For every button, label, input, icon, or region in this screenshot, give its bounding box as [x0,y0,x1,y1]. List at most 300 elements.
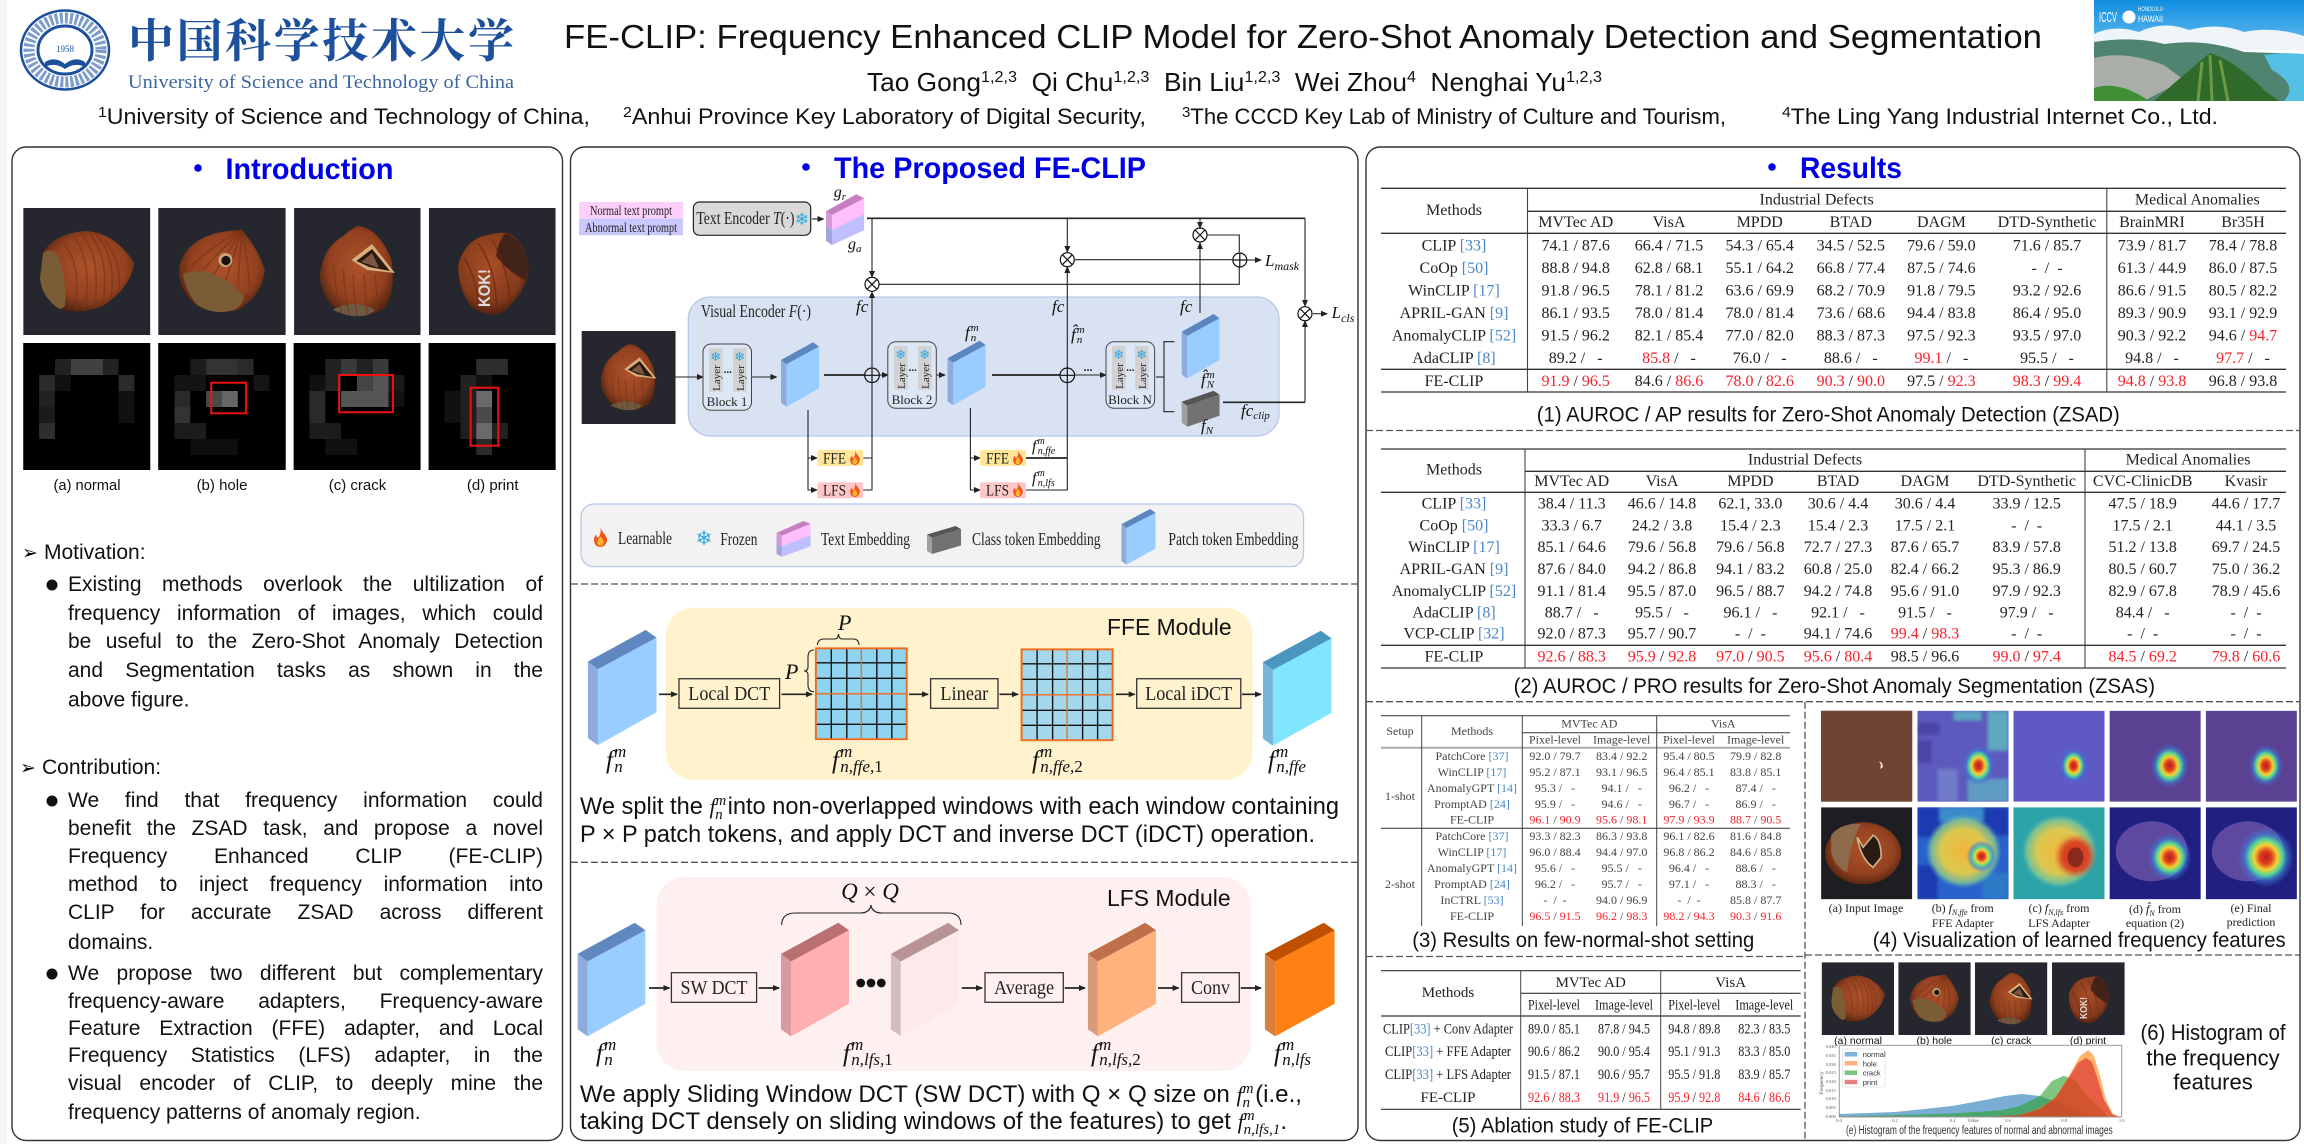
table: few-normal-shot results: 81.6 / 84.8 [1730,829,1781,843]
table: AUROC / PRO results: 97.9 / - [2000,604,2054,622]
FFE module diagram: n,ffe,1 [840,757,883,776]
hazelnut thumbnails [1822,962,2125,1047]
table: ablation study: 95.1 / 91.3 [1668,1044,1720,1060]
text block: contribution: CLIP for accurate ZSAD across different [68,901,543,924]
table: AUROC / AP results: FE-CLIP [1425,373,1483,390]
table: AUROC / PRO results: 95.6 / 80.4 [1804,648,1872,666]
loss labels: L [1332,303,1341,322]
feature labels: m [971,322,979,334]
table: AUROC / AP results: 95.5 / - [2020,350,2074,367]
table: ablation study: 90.6 / 86.2 [1528,1044,1580,1060]
table: ablation study: FE-CLIP [1420,1090,1476,1106]
FFE module diagram: f [832,747,839,774]
table: AUROC / PRO results: 24.2 / 3.8 [1632,518,1692,534]
table: few-normal-shot results: InCTRL [53] [1440,893,1504,907]
table: few-normal-shot results: 94.1 / - [1602,781,1642,795]
table: AUROC / PRO results: 96.5 / 88.7 [1716,583,1785,600]
table: AUROC / AP results: 94.8 / 93.8 [2118,373,2186,390]
table: AUROC / AP results: 78.4 / 78.8 [2209,238,2277,254]
table: ablation study: CLIP[33] + FFE Adapter [1385,1044,1511,1060]
table: few-normal-shot results: 79.9 / 82.8 [1730,749,1781,763]
table: AUROC / AP results: 93.1 / 92.9 [2209,305,2277,322]
table: few-normal-shot results: 94.6 / - [1602,797,1642,811]
authors: 1,2,3 [1244,69,1280,86]
table: AUROC / AP results: 73.6 / 68.6 [1817,305,1885,322]
axes labels: 0.2 [1892,1118,1898,1123]
table: few-normal-shot results: 98.2 / 94.3 [1663,909,1715,923]
table: AUROC / PRO results: 95.6 / 91.0 [1891,583,1959,600]
text block: motivation: ➢ [22,542,38,564]
table: AUROC / PRO results: BTAD [1817,473,1859,490]
feature labels: f [1201,416,1206,435]
table: ablation study: CLIP[33] + Conv Adapter [1383,1022,1513,1038]
table: few-normal-shot results: WinCLIP [17] [1438,845,1506,859]
FFE description [580,793,1339,848]
table: ablation study: 90.6 / 95.7 [1598,1067,1650,1083]
diagram legend [581,504,1304,567]
feature labels: f [965,323,970,342]
table: few-normal-shot results: 96.4 / - [1669,861,1709,875]
table: AUROC / AP results: 91.9 / 96.5 [1541,373,1610,390]
table: AUROC / PRO results: 62.1, 33.0 [1718,496,1782,512]
encoder block 1: Layer [735,365,747,391]
visualization sub-captions: prediction [2227,915,2275,929]
table: ablation study [1381,971,1801,1109]
table: ablation study: Image-level [1595,998,1653,1014]
feature labels: clip [1253,410,1270,422]
table: AUROC / PRO results: 88.7 / - [1545,604,1599,622]
visualization sub-captions: from [1967,901,1994,915]
table: AUROC / PRO results: Medical Anomalies [2126,452,2250,468]
table: few-normal-shot results: 94.0 / 96.9 [1596,893,1647,907]
table: AUROC / PRO results: MPDD [1727,473,1774,490]
loss labels: L [1265,251,1274,270]
table: AUROC / PRO results: 69.7 / 24.5 [2212,539,2280,556]
table: ablation study: 95.5 / 91.8 [1668,1067,1720,1083]
axes labels: 0.010 [1826,1096,1837,1101]
table: AUROC / PRO results: CLIP [33] [1422,496,1486,512]
table: few-normal-shot results: FE-CLIP [1450,909,1494,923]
ICCV conference photo: HONOLULU [2138,7,2163,13]
table: AUROC / PRO results: 92.0 / 87.3 [1537,626,1606,642]
feature labels: fc [856,297,869,316]
table: AUROC / PRO results: 80.5 / 60.7 [2108,561,2177,578]
table: AUROC / AP results: 91.5 / 96.2 [1541,328,1610,344]
FFE description: P × P patch tokens, and apply DCT and inverse DCT (iDCT) operation. [580,821,1315,848]
table: ablation study: Methods [1422,985,1474,1001]
encoder block 2: Block 2 [892,392,932,407]
table: AUROC / PRO results: AnomalyCLIP [52] [1392,583,1516,600]
caption: histogram: the frequency [2146,1046,2280,1070]
FFE module diagram: P [837,610,851,635]
table: AUROC / PRO results: MVTec AD [1534,473,1609,490]
table: few-normal-shot results: MVTec AD [1561,716,1618,730]
table: AUROC / AP results: Br35H [2221,214,2265,231]
table: AUROC / PRO results: 84.4 / - [2116,604,2170,622]
caption: table 1: (1) AUROC / AP results for Zero-Shot Anomaly Detection (ZSAD) [1537,404,2120,426]
authors: 1,2,3 [1113,69,1149,86]
table: AUROC / PRO results: 97.0 / 90.5 [1716,648,1785,666]
FFE module diagram: Linear [940,684,989,705]
table: few-normal-shot results: 96.2 / - [1535,877,1575,891]
table: AUROC / AP results: 78.0 / 81.4 [1635,305,1703,322]
feature labels [856,297,1270,489]
LFS module diagram: f [1274,1040,1281,1067]
table: AUROC / AP results: 66.4 / 71.5 [1635,238,1703,254]
table: few-normal-shot results: 95.5 / - [1602,861,1642,875]
table: AUROC / AP results: 99.1 / - [1915,350,1968,367]
FFE description: We split the f [580,793,716,820]
encoder block N: ❄ [1113,348,1124,363]
table: few-normal-shot results [1381,716,1790,926]
table: few-normal-shot results: Pixel-level [1529,732,1582,746]
FFE description: n [715,807,723,823]
table: few-normal-shot results: 93.3 / 82.3 [1529,829,1581,843]
axes labels: 1.0 [2119,1118,2125,1123]
diagram legend: Learnable [618,528,672,548]
hazelnut thumbnails: (a) normal [1834,1035,1882,1047]
LFS module diagram: f [1091,1040,1098,1067]
heatmap: crack [294,343,421,470]
axes labels: 0.020 [1826,1079,1837,1084]
visualization sub-captions: from [2063,901,2090,915]
diagram legend: Class token Embedding [972,529,1100,549]
affiliations: University of Science and Technology of China, [107,104,590,129]
adapter boxes: LFS [986,482,1009,500]
table: AUROC / AP results: 82.1 / 85.4 [1635,328,1703,344]
authors: 1,2,3 [1566,69,1602,86]
table: few-normal-shot results: - / - [1543,893,1567,907]
table: AUROC / PRO results: 60.8 / 25.0 [1804,561,1872,578]
table: few-normal-shot results: 95.4 / 80.5 [1663,749,1715,763]
ICCV conference photo [2094,0,2304,101]
hazelnut photos row [23,208,556,335]
table: AUROC / PRO results: - / - [2011,626,2042,642]
visualization of learned frequency features [1821,711,2297,930]
table: AUROC / PRO results: 94.1 / 83.2 [1716,561,1785,578]
heading: introduction: Introduction [226,153,394,186]
table: AUROC / PRO results: 75.0 / 36.2 [2212,561,2280,578]
table: few-normal-shot results: 96.1 / 82.6 [1663,829,1715,843]
feature labels: n,lfs [1038,478,1055,489]
FFE module diagram [588,608,1332,780]
encoder block 1: ... [724,364,732,376]
table: AUROC / PRO results: VCP-CLIP [32] [1403,626,1505,642]
table: AUROC / AP results: 78.1 / 81.2 [1635,282,1703,300]
legend: print [1863,1078,1878,1087]
FFE module title: FFE Module [1107,614,1232,640]
FFE module diagram: f [606,747,613,774]
table: AUROC / PRO results: 99.4 / 98.3 [1891,626,1959,642]
table: AUROC / AP results: Industrial Defects [1760,192,1874,208]
histogram chart [1819,1044,2125,1124]
table: few-normal-shot results: 96.1 / 90.9 [1529,812,1581,826]
table: AUROC / AP results: 54.3 / 65.4 [1725,238,1794,254]
encoder block 1: Block 1 [707,394,747,409]
FFE module diagram: m [1040,742,1052,761]
adapter boxes: FFE [986,450,1009,468]
encoder block 2: Layer [920,363,932,389]
encoder block N: Layer [1114,363,1126,389]
FFE module diagram: P [784,659,798,684]
table: AUROC / AP results: 84.6 / 86.6 [1635,373,1703,390]
table: AUROC / PRO results: 91.5 / - [1898,604,1952,622]
table: ablation study: 91.5 / 87.1 [1528,1067,1580,1083]
table: few-normal-shot results: 95.6 / 98.1 [1596,812,1647,826]
table: AUROC / AP results: VisA [1653,214,1686,231]
table: AUROC / PRO results: 46.6 / 14.8 [1628,496,1696,512]
legend: normal [1863,1050,1886,1059]
table: AUROC / AP results: 93.2 / 92.6 [2013,282,2081,300]
feature labels: f [1032,438,1036,455]
LFS description: n [1243,1095,1250,1111]
table: AUROC / AP results: 90.3 / 90.0 [1817,373,1885,390]
axes labels: 0.040 [1826,1044,1837,1049]
affiliations [98,104,2218,129]
table: AUROC / PRO results: VisA [1646,473,1679,490]
table: few-normal-shot results: AnomalyGPT [14] [1427,781,1517,795]
table: AUROC / PRO results: 94.1 / 74.6 [1804,626,1872,642]
axes labels [1819,1044,2125,1124]
table: AUROC / PRO results: 30.6 / 4.4 [1895,496,1955,512]
table: few-normal-shot results: 85.8 / 87.7 [1730,893,1781,907]
table: AUROC / PRO results: DAGM [1901,473,1949,490]
authors: 1,2,3 [981,69,1017,86]
table: few-normal-shot results: Image-level [1727,732,1785,746]
text block: contribution: Frequency Enhanced CLIP (FE-CLIP) [68,845,543,868]
text block: contribution: Feature Extraction (FFE) adapter, and Local [68,1017,543,1040]
text block: motivation: Motivation: [44,541,146,564]
table: few-normal-shot results: PatchCore [37] [1436,829,1508,843]
table: AUROC / PRO results: 82.4 / 66.2 [1891,561,1959,578]
encoder block N [1106,342,1155,408]
table: ablation study: 92.6 / 88.3 [1528,1090,1580,1106]
feature labels: m [1207,369,1215,381]
table: AUROC / PRO results: 94.2 / 86.8 [1628,561,1696,578]
text block: motivation [22,541,543,711]
FFE module diagram: n [614,757,623,776]
image captions: (c) crack [329,477,387,494]
visualization sub-captions: (e) Final [2230,901,2272,915]
prompts: Normal text prompt [590,203,672,218]
frequency heatmaps row [23,343,556,470]
feature labels: fc [1052,297,1065,316]
table: AUROC / AP results: 62.8 / 68.1 [1635,260,1703,277]
table: AUROC / AP results: 68.2 / 70.9 [1817,282,1885,300]
table: AUROC / AP results: 89.2 / - [1549,350,1603,367]
table: few-normal-shot results: Methods [1451,724,1493,738]
visualization sub-captions: equation (2) [2126,916,2184,930]
table: AUROC / AP results: 86.6 / 91.5 [2118,282,2186,300]
feature labels: m [1037,436,1045,447]
table: few-normal-shot results: Setup [1386,724,1414,738]
LFS module diagram [578,877,1335,1071]
text block: contribution: visual encoder of CLIP, to deeply mine the [68,1072,543,1095]
feature labels: n [1077,334,1083,346]
table: AUROC / AP results: DTD-Synthetic [1998,214,2096,231]
adapter boxes [817,450,1026,500]
hazelnut thumbnails: KOK! [2079,997,2090,1019]
LFS module diagram: n,lfs,1 [851,1050,893,1069]
LFS description: m [1244,1108,1255,1124]
LFS module diagram: m [1099,1035,1111,1054]
text block: contribution: We find that frequency information could [68,789,543,812]
table: ablation study: 83.3 / 85.0 [1738,1044,1790,1060]
table: AUROC / AP results: 94.8 / - [2125,350,2179,367]
table: few-normal-shot results: 1-shot [1385,789,1416,803]
ICCV conference photo: HAWAII [2138,14,2163,24]
table: AUROC / PRO results: 97.9 / 92.3 [1992,583,2061,600]
table: AUROC / AP results: BrainMRI [2119,214,2185,231]
table: AUROC / AP results: DAGM [1917,214,1966,231]
text block: contribution [20,756,543,1124]
icon: university seal [21,10,109,90]
table: AUROC / AP results: CLIP [33] [1422,238,1486,254]
table: few-normal-shot results: 96.8 / 86.2 [1663,845,1715,859]
encoder block 2: Layer [896,363,908,389]
table: AUROC / PRO results: 96.1 / - [1724,604,1777,622]
affiliations: 1 [98,104,107,121]
FFE module diagram: m [614,742,626,761]
table: AUROC / PRO results: WinCLIP [17] [1408,539,1500,556]
table: AUROC / AP results: 88.6 / - [1824,350,1878,367]
table: ablation study: Image-level [1735,998,1793,1014]
table: AUROC / PRO results: - / - [1735,626,1766,642]
encoder block 1: ❄ [734,350,745,365]
connector arrows and lines [676,218,1327,490]
table: few-normal-shot results: 87.4 / - [1736,781,1776,795]
axes labels: 0.8 [2061,1118,2068,1123]
encoder block 1: Layer [711,365,723,391]
table: AUROC / AP results: 80.5 / 82.2 [2209,282,2277,300]
table: AUROC / AP results: 89.3 / 90.9 [2118,305,2186,322]
axes labels: Frequency [1819,1071,1825,1095]
axes labels: 0.015 [1826,1088,1837,1093]
table: few-normal-shot results: 95.2 / 87.1 [1529,765,1581,779]
axes labels: 0.000 [1826,1114,1837,1119]
table: AUROC / PRO results: Industrial Defects [1748,452,1862,468]
table: few-normal-shot results: PatchCore [37] [1436,749,1508,763]
table: few-normal-shot results: WinCLIP [17] [1438,765,1506,779]
feature labels: ... [1084,360,1092,374]
table: AUROC / PRO results: - / - [2230,626,2262,642]
axes labels: 0.035 [1826,1053,1837,1058]
table: AUROC / AP results: 78.0 / 81.4 [1725,305,1794,322]
visualization sub-captions: (a) Input Image [1829,901,1903,915]
encoder block 2: ❄ [919,348,930,363]
table: AUROC / AP results: Methods [1426,202,1482,219]
authors: Nenghai Yu [1416,67,1566,97]
image captions: (b) hole [197,477,247,494]
encoder block N: ❄ [1136,348,1147,363]
legend [1843,1049,1886,1087]
feature labels: N [1205,425,1214,437]
table: few-normal-shot results: VisA [1711,716,1736,730]
table: AUROC / AP results: 66.8 / 77.4 [1817,260,1885,277]
table: AUROC / PRO results: 79.6 / 56.8 [1628,539,1696,556]
table: AUROC / AP results: 96.8 / 93.8 [2209,373,2277,390]
axes labels: 0.0 [1836,1118,1843,1123]
text encoder: ❄ [795,210,809,230]
table: AUROC / PRO results: 92.6 / 88.3 [1537,648,1606,666]
LFS module diagram: n [604,1050,613,1069]
feature labels: m [1037,468,1045,479]
logo English wordmark: University of Science and Technology of China [128,72,515,93]
authors: Tao Gong [867,67,980,97]
table: AUROC / AP results: 94.4 / 83.8 [1907,305,1976,322]
feature labels: n [971,332,977,344]
table: AUROC / PRO results: 33.3 / 6.7 [1541,518,1602,534]
anomaly boxes [211,375,498,446]
row 2: hazelnut samples [1821,807,2297,899]
adapter boxes: FFE [823,450,846,468]
table: AUROC / AP results: 79.6 / 59.0 [1907,238,1976,254]
text block: contribution: We propose two different but complementary [68,962,543,985]
caption: table 3: (3) Results on few-normal-shot setting [1412,929,1754,952]
table: AUROC / AP results: 97.5 / 92.3 [1907,373,1976,390]
text block: contribution: domains. [68,931,153,954]
table: AUROC / AP results: AnomalyCLIP [52] [1392,328,1516,344]
text encoder [693,202,811,235]
table: few-normal-shot results: FE-CLIP [1450,812,1494,826]
table: AUROC / AP results: - / - [2031,260,2063,277]
table: AUROC / PRO results: 95.7 / 90.7 [1628,626,1696,642]
FFE module diagram: Local DCT [688,684,770,705]
table: AUROC / PRO results: 84.5 / 69.2 [2108,648,2177,666]
feature labels: f [1032,470,1036,487]
table: AUROC / AP results: 88.3 / 87.3 [1817,328,1885,344]
table: AUROC / AP results [1381,188,2286,392]
table: AUROC / AP results: 71.6 / 85.7 [2013,238,2081,254]
table: AUROC / PRO results: 95.5 / 87.0 [1628,583,1696,600]
table: few-normal-shot results: 95.9 / - [1535,797,1575,811]
table: AUROC / AP results: 34.5 / 52.5 [1817,238,1885,254]
visualization sub-captions: (d) f̂ [2129,902,2149,916]
diagram legend: ❄ [696,526,712,550]
table: AUROC / AP results: Medical Anomalies [2135,192,2260,208]
text embedding: g [834,184,842,201]
table: few-normal-shot results: 83.8 / 85.1 [1730,765,1781,779]
icon: university seal: 1958 [56,44,74,54]
table: few-normal-shot results: 88.6 / - [1736,861,1776,875]
encoder block 2: ... [909,362,917,374]
table: AUROC / PRO results: 47.5 / 18.9 [2108,496,2177,512]
table: AUROC / AP results: MVTec AD [1538,214,1613,231]
chart caption: (e) Histogram of the frequency features of normal and abnormal images [1846,1125,2113,1137]
logo Chinese wordmark: 中国科学技术大学 [128,5,514,71]
LFS module diagram: n,lfs [1282,1050,1311,1069]
FFE module diagram: m [1276,742,1288,761]
panel: results [1366,147,2300,1140]
table: AUROC / AP results: 86.1 / 93.5 [1541,305,1610,322]
table: few-normal-shot results: 95.7 / - [1602,877,1642,891]
LFS module diagram: Conv [1191,978,1230,999]
table: AUROC / AP results: CoOp [50] [1420,260,1488,277]
table: AUROC / PRO results: 95.3 / 86.9 [1992,561,2061,578]
LFS module diagram: n,lfs,2 [1099,1050,1141,1069]
table: AUROC / PRO results: AdaCLIP [8] [1412,604,1496,622]
text block: contribution: frequency-aware adapters, Frequency-aware [68,990,543,1013]
loss labels [1264,251,1355,325]
axes labels: 0.6 [2005,1118,2012,1123]
table: AUROC / PRO results [1381,449,2286,668]
table: ablation study: 91.9 / 96.5 [1598,1090,1650,1106]
caption: table 5: (5) Ablation study of FE-CLIP [1452,1114,1713,1138]
affiliations: 4 [1782,104,1791,121]
table: ablation study: 89.0 / 85.1 [1528,1022,1580,1038]
LFS description: taking DCT densely on sliding windows of the features) to get f [580,1108,1244,1135]
visualization sub-captions: from [2155,902,2182,916]
